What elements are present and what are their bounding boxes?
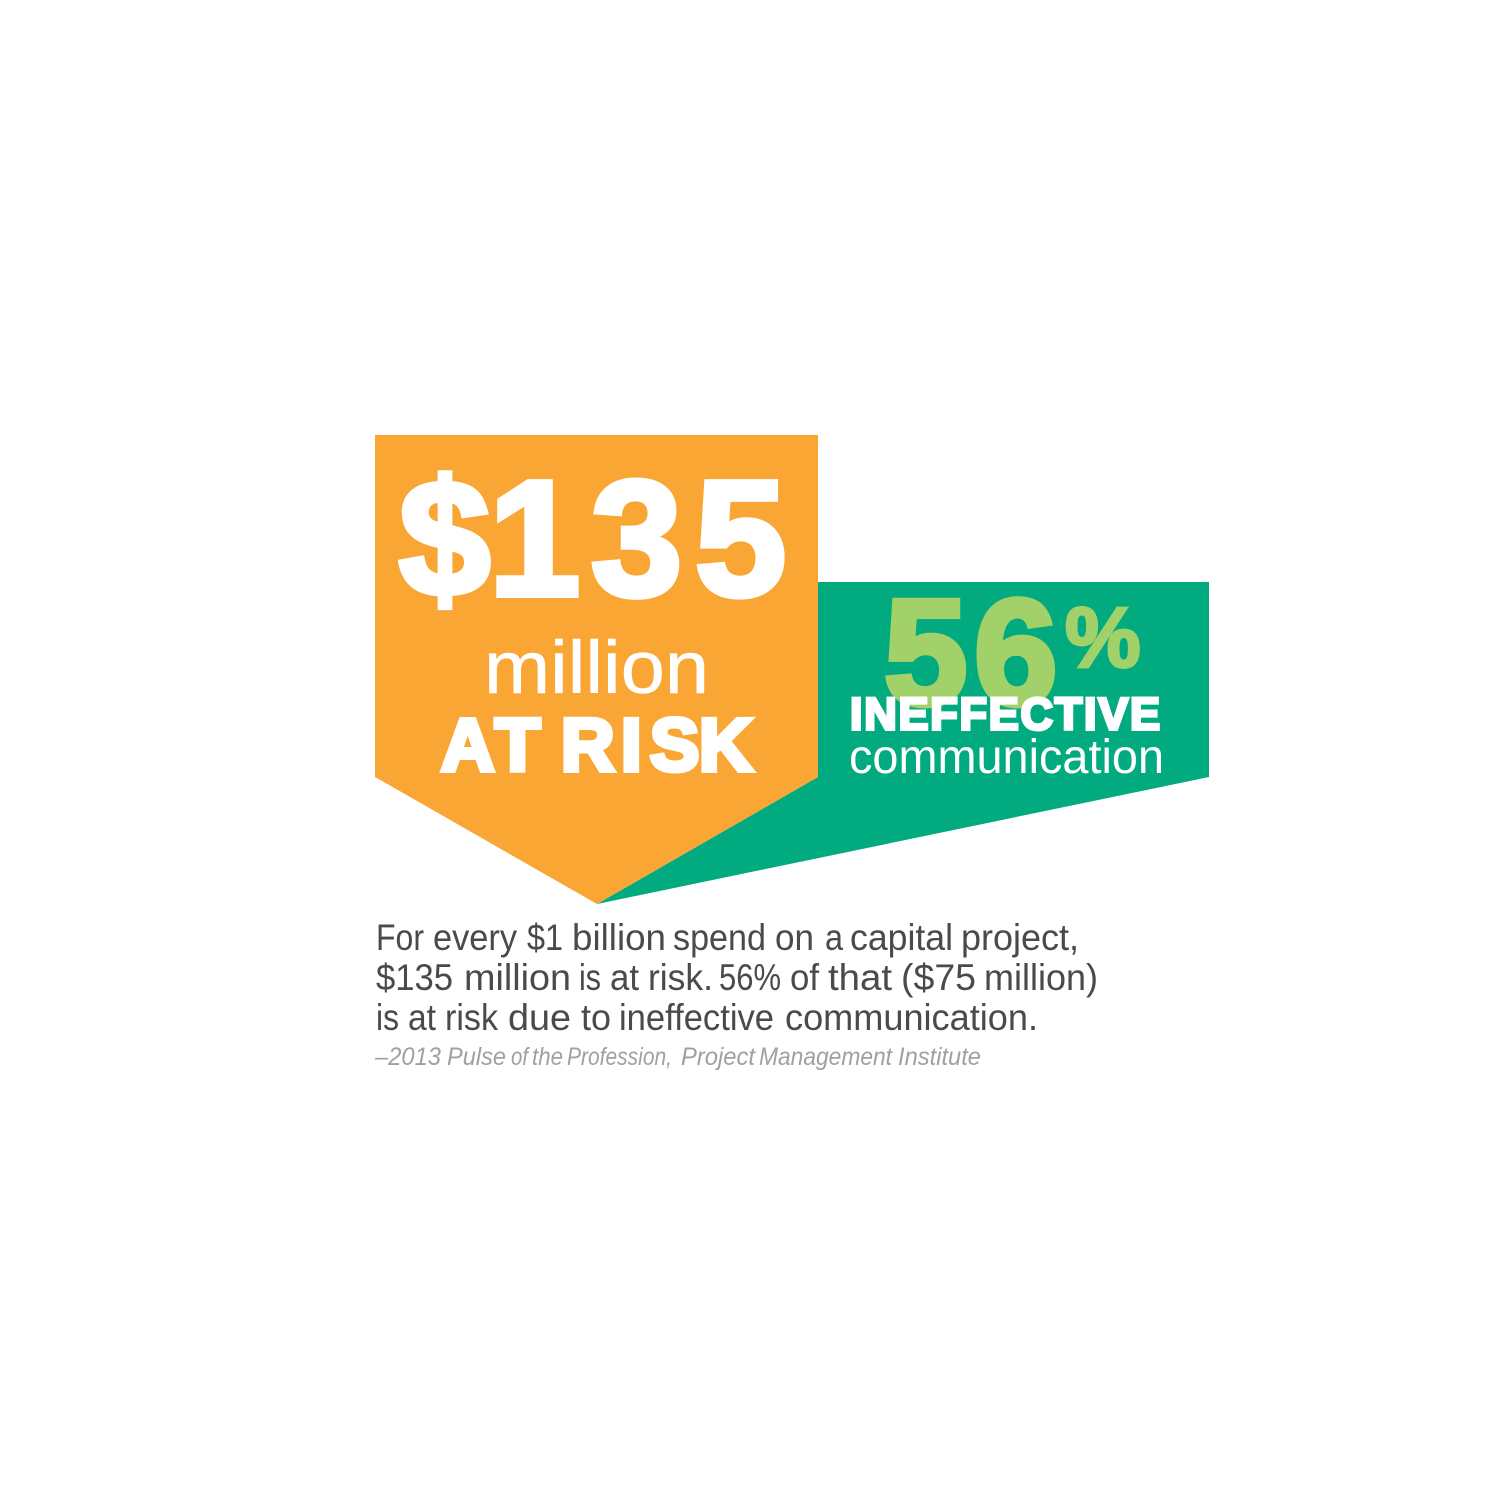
- description text: million: [464, 957, 571, 998]
- communication label: communication: [849, 731, 1164, 784]
- source citation: Profession,: [567, 1043, 672, 1071]
- description text: risk.: [648, 957, 713, 998]
- description text: is: [579, 957, 601, 998]
- source citation: –2013: [374, 1043, 441, 1071]
- ineffective label: INEFFECTIVE: [850, 688, 1160, 740]
- description text: that: [828, 957, 893, 998]
- 56 percent figure: %: [1065, 591, 1141, 686]
- source citation: of: [511, 1043, 530, 1071]
- source citation: Pulse: [447, 1043, 506, 1071]
- description text: spend: [673, 917, 766, 958]
- panel: orange arrow: [375, 435, 818, 904]
- 56 percent figure: 56: [884, 568, 1057, 736]
- description text: communication.: [785, 997, 1038, 1038]
- description text: at: [610, 957, 640, 998]
- description text: a: [825, 917, 843, 958]
- description text: $1: [527, 917, 563, 958]
- description text: every: [433, 917, 517, 958]
- description text: 56%: [719, 957, 781, 998]
- description text: million): [984, 957, 1098, 998]
- description text: [376, 917, 1098, 1038]
- panel: green communication banner: [597, 568, 1209, 904]
- description text: $135: [376, 957, 453, 998]
- source citation: the: [532, 1043, 563, 1071]
- 135 dollar figure: $135: [399, 447, 786, 630]
- description text: is: [376, 997, 399, 1038]
- description text: risk: [445, 997, 498, 1038]
- description text: project,: [961, 917, 1079, 958]
- description text: on: [775, 917, 814, 958]
- source citation: Institute: [898, 1043, 981, 1071]
- description text: to: [581, 997, 611, 1038]
- description text: billion: [572, 917, 666, 958]
- description text: of: [790, 957, 820, 998]
- 56 percent figure: [884, 568, 1141, 736]
- description text: ($75: [901, 957, 976, 998]
- description text: ineffective: [619, 997, 774, 1038]
- source citation: Project: [681, 1043, 756, 1071]
- description text: capital: [850, 917, 953, 958]
- description text: For: [376, 917, 424, 958]
- description text: at: [408, 997, 437, 1038]
- description text: due: [508, 997, 571, 1038]
- million label: million: [484, 626, 709, 709]
- source citation: [374, 1043, 981, 1071]
- source citation: Management: [759, 1043, 893, 1071]
- at risk label: ATRISK: [441, 704, 752, 786]
